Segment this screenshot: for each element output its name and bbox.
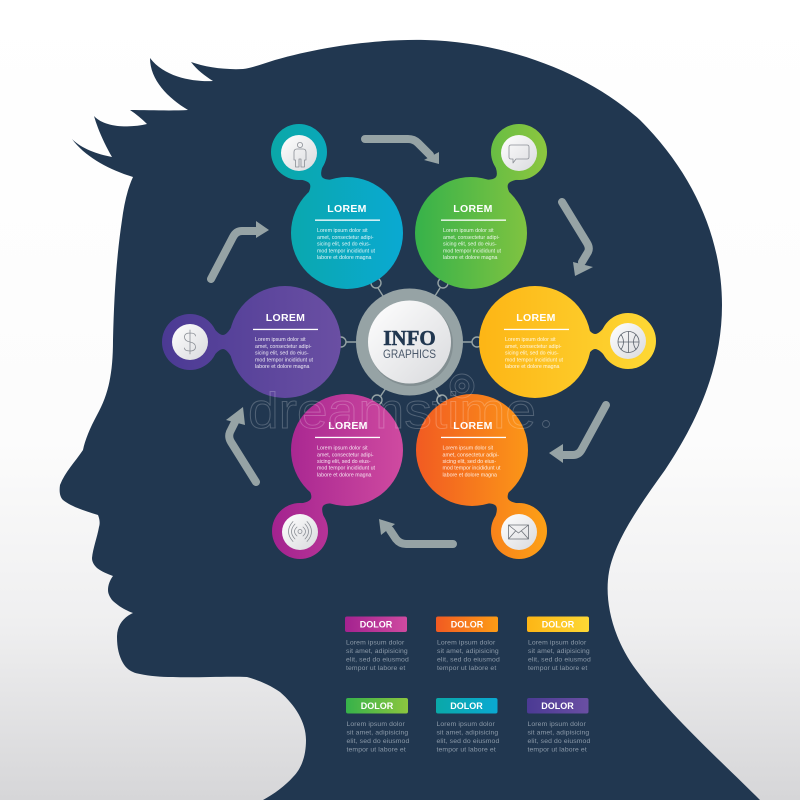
text block: sicing elit, sed do eius- bbox=[505, 351, 559, 357]
arrow: lower right bbox=[549, 405, 606, 463]
text block: Lorem ipsum dolor sit bbox=[255, 337, 306, 343]
text block: amet, consectetur adipi- bbox=[443, 235, 500, 241]
text block: labore et dolore magna bbox=[442, 472, 497, 478]
heading: LOREM bbox=[453, 203, 493, 215]
hub title: INFO bbox=[383, 326, 436, 350]
arrow: lower left bbox=[226, 407, 256, 482]
panel: purple bbox=[162, 286, 341, 398]
legend: yellow: sit amet, adipisicing bbox=[528, 648, 590, 655]
central hub bbox=[356, 288, 463, 396]
legend: orange: Lorem ipsum dolor bbox=[437, 640, 496, 646]
text block: mod tempor incididunt ut bbox=[505, 357, 564, 363]
panel: teal bbox=[271, 124, 403, 289]
text block: labore et dolore magna bbox=[255, 364, 310, 370]
text block: amet, consectetur adipi- bbox=[442, 452, 499, 458]
legend: purple: tempor ut labore et bbox=[528, 746, 587, 754]
legend: yellow: DOLOR bbox=[542, 620, 575, 630]
legend: orange: DOLOR bbox=[451, 620, 484, 630]
icon: person bbox=[294, 142, 306, 167]
legend: orange bbox=[436, 616, 500, 672]
legend: teal: DOLOR bbox=[450, 701, 483, 711]
watermark: dreamstime bbox=[248, 383, 536, 439]
legend: green: DOLOR bbox=[361, 701, 394, 711]
heading: LOREM bbox=[327, 203, 367, 215]
arrow: upper left bbox=[211, 221, 269, 279]
text block: labore et dolore magna bbox=[443, 255, 498, 261]
legend: green bbox=[346, 698, 409, 754]
text block: amet, consectetur adipi- bbox=[255, 344, 312, 350]
text block: labore et dolore magna bbox=[317, 472, 372, 478]
text block: sicing elit, sed do eius- bbox=[442, 459, 496, 465]
text block: Lorem ipsum dolor sit bbox=[442, 446, 494, 452]
legend: teal bbox=[436, 698, 499, 754]
text block: Lorem ipsum dolor sit bbox=[443, 228, 494, 234]
icon: basketball bbox=[618, 332, 639, 352]
panel: magenta bbox=[272, 394, 403, 559]
text block: sicing elit, sed do eius- bbox=[255, 351, 309, 357]
arrow: top bbox=[365, 139, 439, 164]
heading: LOREM bbox=[266, 312, 305, 324]
panel: green bbox=[415, 124, 547, 289]
legend: magenta: elit, sed do eiusmod bbox=[346, 656, 409, 664]
legend: green: Lorem ipsum dolor bbox=[346, 721, 405, 728]
text block: sicing elit, sed do eius- bbox=[317, 459, 371, 465]
arrow: upper right bbox=[562, 202, 593, 276]
hub subtitle: GRAPHICS bbox=[383, 349, 436, 361]
icon: dollar bbox=[184, 330, 196, 354]
legend: teal: tempor ut labore et bbox=[436, 746, 496, 754]
text block: sicing elit, sed do eius- bbox=[317, 242, 371, 248]
legend: purple: elit, sed do eiusmod bbox=[528, 738, 590, 745]
legend: teal: elit, sed do eiusmod bbox=[436, 738, 499, 745]
legend: orange: tempor ut labore et bbox=[437, 665, 496, 672]
panel: orange bbox=[416, 394, 547, 559]
heading: LOREM bbox=[328, 420, 368, 432]
legend: yellow: elit, sed do eiusmod bbox=[528, 656, 591, 664]
icon: speech bubble bbox=[509, 145, 529, 163]
legend: teal: sit amet, adipisicing bbox=[436, 730, 498, 736]
text block: amet, consectetur adipi- bbox=[317, 452, 374, 458]
legend: magenta bbox=[345, 616, 409, 672]
legend: green: tempor ut labore et bbox=[346, 746, 406, 754]
legend: orange: sit amet, adipisicing bbox=[437, 648, 499, 655]
text block: labore et dolore magna bbox=[505, 364, 560, 370]
icon: signal bbox=[288, 522, 312, 542]
text block: amet, consectetur adipi- bbox=[505, 344, 562, 350]
arrow: bottom bbox=[379, 519, 453, 544]
text block: mod tempor incididunt ut bbox=[255, 357, 314, 363]
connector lines: hub to circles bbox=[336, 278, 482, 405]
legend: green: elit, sed do eiusmod bbox=[346, 738, 409, 745]
legend: magenta: sit amet, adipisicing bbox=[346, 648, 408, 655]
text block: mod tempor incididunt ut bbox=[317, 248, 376, 254]
legend: purple: Lorem ipsum dolor bbox=[528, 721, 586, 728]
legend: yellow: tempor ut labore et bbox=[528, 665, 587, 672]
text block: mod tempor incididunt ut bbox=[317, 466, 376, 472]
icon: envelope bbox=[508, 525, 528, 539]
legend: magenta: DOLOR bbox=[360, 620, 393, 630]
text block: mod tempor incididunt ut bbox=[443, 248, 502, 254]
text block: mod tempor incididunt ut bbox=[442, 466, 501, 472]
legend: magenta: Lorem ipsum dolor bbox=[346, 640, 405, 646]
heading: LOREM bbox=[516, 312, 556, 324]
legend: purple: sit amet, adipisicing bbox=[528, 730, 589, 736]
legend: orange: elit, sed do eiusmod bbox=[437, 656, 500, 664]
text block: amet, consectetur adipi- bbox=[317, 235, 374, 241]
text block: sicing elit, sed do eius- bbox=[443, 242, 497, 248]
text block: Lorem ipsum dolor sit bbox=[317, 228, 368, 234]
legend: teal: Lorem ipsum dolor bbox=[436, 721, 495, 728]
legend: purple: DOLOR bbox=[541, 701, 574, 711]
legend: green: sit amet, adipisicing bbox=[346, 730, 408, 736]
legend: yellow: Lorem ipsum dolor bbox=[528, 640, 587, 646]
legend: magenta: tempor ut labore et bbox=[346, 665, 405, 672]
heading: LOREM bbox=[453, 420, 493, 432]
legend: purple bbox=[527, 698, 590, 754]
legend: yellow bbox=[527, 616, 591, 672]
text block: Lorem ipsum dolor sit bbox=[505, 337, 556, 343]
text block: Lorem ipsum dolor sit bbox=[317, 446, 368, 452]
panel: yellow bbox=[479, 286, 656, 398]
text block: labore et dolore magna bbox=[317, 255, 372, 261]
